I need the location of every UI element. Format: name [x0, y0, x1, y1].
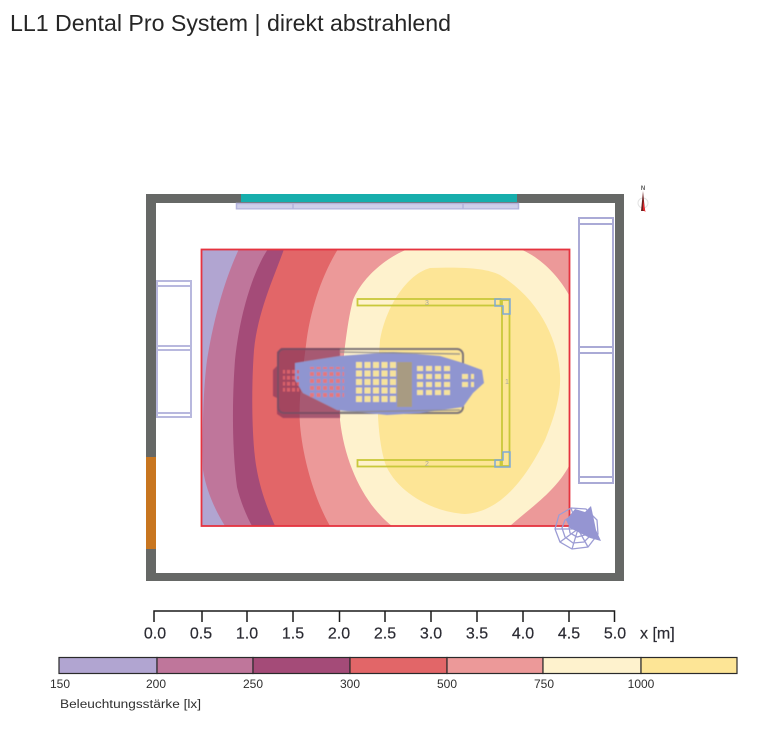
axis labels: 3.5: [466, 626, 488, 642]
axis labels: 0.0: [144, 626, 166, 642]
window: [241, 194, 517, 202]
top cabinet: [236, 203, 518, 209]
plant: [555, 506, 601, 549]
axis labels: 1.0: [236, 626, 258, 642]
chair top and bottom rails: [340, 352, 460, 412]
room plan: [146, 186, 648, 581]
chair base frame: [278, 349, 463, 413]
axis labels: 2.5: [374, 626, 396, 642]
legend values: 300: [340, 677, 360, 691]
band 300-500: [252, 249, 569, 526]
illuminance contour map: [201, 249, 570, 526]
legend: [50, 658, 737, 711]
dental chair: [273, 348, 484, 418]
band 250-300: [233, 249, 569, 526]
worktop corners: [495, 299, 510, 467]
band 200-250: [203, 249, 569, 526]
room walls: [146, 194, 624, 581]
title: LL1 Dental Pro System | direkt abstrahlend: [10, 10, 451, 36]
axis labels: 3.0: [420, 626, 442, 642]
x axis scale: [144, 611, 675, 642]
left cabinet: [157, 281, 191, 417]
legend values: 200: [146, 677, 166, 691]
axis labels: 5.0: [604, 626, 626, 642]
grid openings: [283, 370, 299, 394]
worktop numbers: 2: [425, 461, 429, 468]
yellow worktop: [358, 299, 510, 466]
axis labels: 4.0: [512, 626, 534, 642]
legend values: 750: [534, 677, 554, 691]
legend values: 500: [437, 677, 457, 691]
legend title: Beleuchtungsstärke [lx]: [60, 699, 201, 711]
measuring area outline: [202, 250, 570, 526]
right cabinet: [579, 218, 613, 483]
axis labels: [144, 626, 626, 642]
chair head shadow: [273, 348, 340, 418]
axis labels: 0.5: [190, 626, 212, 642]
legend values: [50, 677, 655, 691]
band 150-200: [201, 249, 569, 526]
worktop numbers: [425, 300, 509, 468]
legend values: 150: [50, 677, 70, 691]
north arrow: [638, 186, 648, 212]
worktop numbers: 1: [505, 379, 509, 386]
chair seat block: [397, 362, 412, 407]
band 500-750: [300, 249, 569, 526]
worktop numbers: 3: [425, 300, 429, 307]
treatment unit frame: [358, 299, 510, 468]
door: [146, 457, 156, 549]
chair body: [295, 352, 484, 415]
legend colour bar: [59, 658, 737, 674]
axis labels: 4.5: [558, 626, 580, 642]
north arrow: N: [641, 186, 645, 192]
legend values: 250: [243, 677, 263, 691]
legend values: 1000: [628, 677, 655, 691]
axis ruler: [154, 611, 614, 622]
axis labels: 1.5: [282, 626, 304, 642]
band 750-1000: [340, 249, 569, 526]
axis labels: 2.0: [328, 626, 350, 642]
axis unit: x [m]: [640, 626, 675, 642]
band over 1000: [378, 268, 560, 514]
